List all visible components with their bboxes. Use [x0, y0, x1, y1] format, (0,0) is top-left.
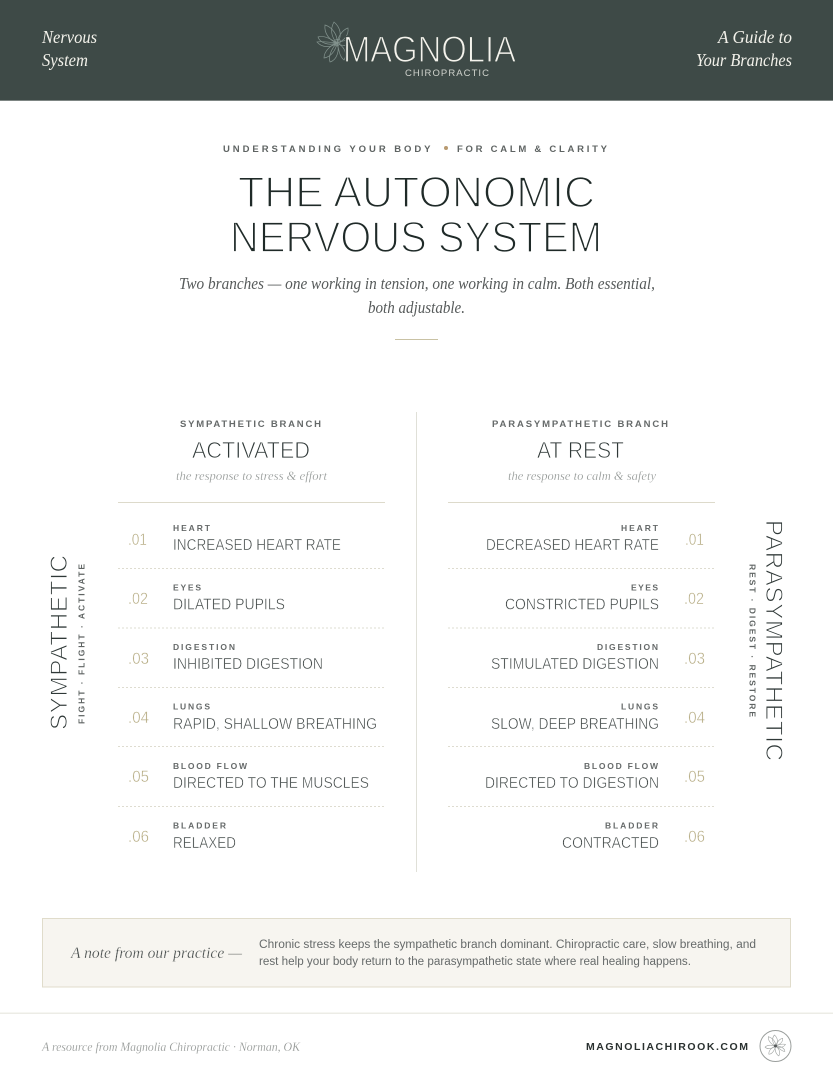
- callout: practice note: Chronic stress keeps the sympathetic branch dominant. Chiropractic care, slow breathing, and: [259, 939, 756, 951]
- sympathetic row 5: BLOOD FLOW: [173, 761, 248, 771]
- sympathetic row 1: INCREASED HEART RATE: [173, 537, 341, 554]
- parasympathetic row 1: [486, 523, 704, 554]
- sympathetic row 6: RELAXED: [173, 835, 236, 852]
- parasympathetic row 4: LUNGS: [621, 702, 658, 712]
- parasympathetic row 1: HEART: [621, 523, 659, 533]
- sympathetic row 3: [128, 642, 323, 673]
- sympathetic row 5: DIRECTED TO THE MUSCLES: [173, 775, 369, 792]
- parasympathetic row 1: DECREASED HEART RATE: [486, 537, 659, 554]
- subtitle: Two branches — one working in tension, one working in calm. Both essential,: [179, 274, 655, 293]
- footer website: MAGNOLIACHIROOK.COM: [586, 1041, 748, 1053]
- sympathetic row 3: DIGESTION: [173, 642, 235, 652]
- parasympathetic row 5: .05: [684, 767, 705, 786]
- parasympathetic row 5: [485, 761, 705, 792]
- parasympathetic row 2: EYES: [631, 582, 658, 592]
- parasympathetic row 5: BLOOD FLOW: [584, 761, 659, 771]
- sympathetic row 4: [128, 702, 377, 733]
- parasympathetic row 4: SLOW, DEEP BREATHING: [491, 716, 659, 733]
- parasympathetic row 6: BLADDER: [605, 820, 658, 830]
- title: THE AUTONOMIC: [238, 168, 595, 217]
- sympathetic row 2: [128, 582, 285, 614]
- vertical label: sympathetic: SYMPATHETIC: [46, 555, 73, 730]
- header left label: [41, 27, 97, 70]
- parasympathetic row 6: CONTRACTED: [562, 835, 659, 852]
- subtitle: both adjustable.: [368, 298, 465, 317]
- vertical label: sympathetic: FIGHT · FLIGHT · ACTIVATE: [76, 564, 86, 724]
- icon: circular flower badge: [760, 1030, 791, 1062]
- title: NERVOUS SYSTEM: [230, 213, 602, 262]
- sympathetic row 4: RAPID, SHALLOW BREATHING: [173, 716, 377, 733]
- eyebrow: [223, 144, 608, 155]
- header left label: Nervous: [41, 27, 97, 47]
- footer credit: A resource from Magnolia Chiropractic · Norman, OK: [41, 1039, 301, 1054]
- eyebrow: UNDERSTANDING YOUR BODY: [223, 144, 431, 155]
- header right label: [696, 27, 792, 70]
- sympathetic row 5: .05: [128, 767, 149, 786]
- sympathetic heading: ACTIVATED: [192, 437, 310, 463]
- header right label: Your Branches: [696, 50, 792, 70]
- parasympathetic row 6: [562, 820, 705, 852]
- parasympathetic heading: [492, 419, 668, 483]
- parasympathetic row 3: STIMULATED DIGESTION: [491, 656, 659, 673]
- sympathetic heading: SYMPATHETIC BRANCH: [180, 419, 321, 430]
- parasympathetic row 3: .03: [684, 649, 705, 668]
- logo: [317, 22, 516, 79]
- vertical label: sympathetic: [46, 555, 86, 730]
- sympathetic heading: [176, 419, 327, 483]
- sympathetic row 5: [128, 761, 369, 792]
- panel: parasympathetic branch: [448, 419, 715, 852]
- sympathetic row 6: [128, 820, 236, 852]
- parasympathetic heading: PARASYMPATHETIC BRANCH: [492, 419, 668, 430]
- parasympathetic row 4: .04: [684, 708, 705, 727]
- sympathetic heading: the response to stress & effort: [176, 468, 327, 483]
- parasympathetic row 5: DIRECTED TO DIGESTION: [485, 775, 659, 792]
- eyebrow: FOR CALM & CLARITY: [457, 144, 608, 155]
- parasympathetic row 2: [505, 582, 704, 614]
- vertical label: parasympathetic: REST · DIGEST · RESTORE: [748, 564, 758, 717]
- header left label: System: [42, 50, 88, 70]
- sympathetic row 1: .01: [128, 530, 147, 549]
- sub wordmark: CHIROPRACTIC: [405, 68, 489, 79]
- icon: magnolia flower: [317, 22, 352, 62]
- parasympathetic row 2: CONSTRICTED PUPILS: [505, 596, 659, 614]
- panel: sympathetic branch: [118, 419, 385, 852]
- callout: practice note: rest help your body return to the parasympathetic state where real healing happens.: [259, 956, 691, 968]
- parasympathetic heading: AT REST: [537, 437, 624, 463]
- parasympathetic row 3: [491, 642, 705, 673]
- sympathetic row 3: INHIBITED DIGESTION: [173, 656, 323, 673]
- vertical label: parasympathetic: [748, 520, 787, 761]
- sympathetic row 1: HEART: [173, 523, 211, 533]
- parasympathetic row 6: .06: [684, 827, 705, 846]
- sympathetic row 6: .06: [128, 827, 149, 846]
- parasympathetic row 4: [491, 702, 705, 733]
- parasympathetic heading: the response to calm & safety: [508, 468, 656, 483]
- parasympathetic row 3: DIGESTION: [597, 642, 658, 652]
- parasympathetic row 1: .01: [685, 530, 704, 549]
- sympathetic row 2: DILATED PUPILS: [173, 596, 285, 614]
- title: [230, 168, 602, 262]
- callout: practice note: [42, 918, 790, 987]
- sympathetic row 6: BLADDER: [173, 820, 226, 830]
- callout: practice note: A note from our practice —: [70, 945, 243, 962]
- sympathetic row 2: .02: [128, 589, 148, 608]
- sympathetic row 1: [128, 523, 341, 554]
- subtitle: [179, 274, 655, 317]
- wordmark: MAGNOLIA: [343, 29, 516, 70]
- header right label: A Guide to: [717, 27, 792, 47]
- footer: [41, 1030, 791, 1062]
- header band: [0, 0, 833, 101]
- vertical label: parasympathetic: PARASYMPATHETIC: [760, 520, 787, 761]
- sympathetic row 3: .03: [128, 649, 149, 668]
- sympathetic row 4: .04: [128, 708, 149, 727]
- sympathetic row 2: EYES: [173, 582, 201, 592]
- sympathetic row 4: LUNGS: [173, 702, 210, 712]
- parasympathetic row 2: .02: [684, 589, 704, 608]
